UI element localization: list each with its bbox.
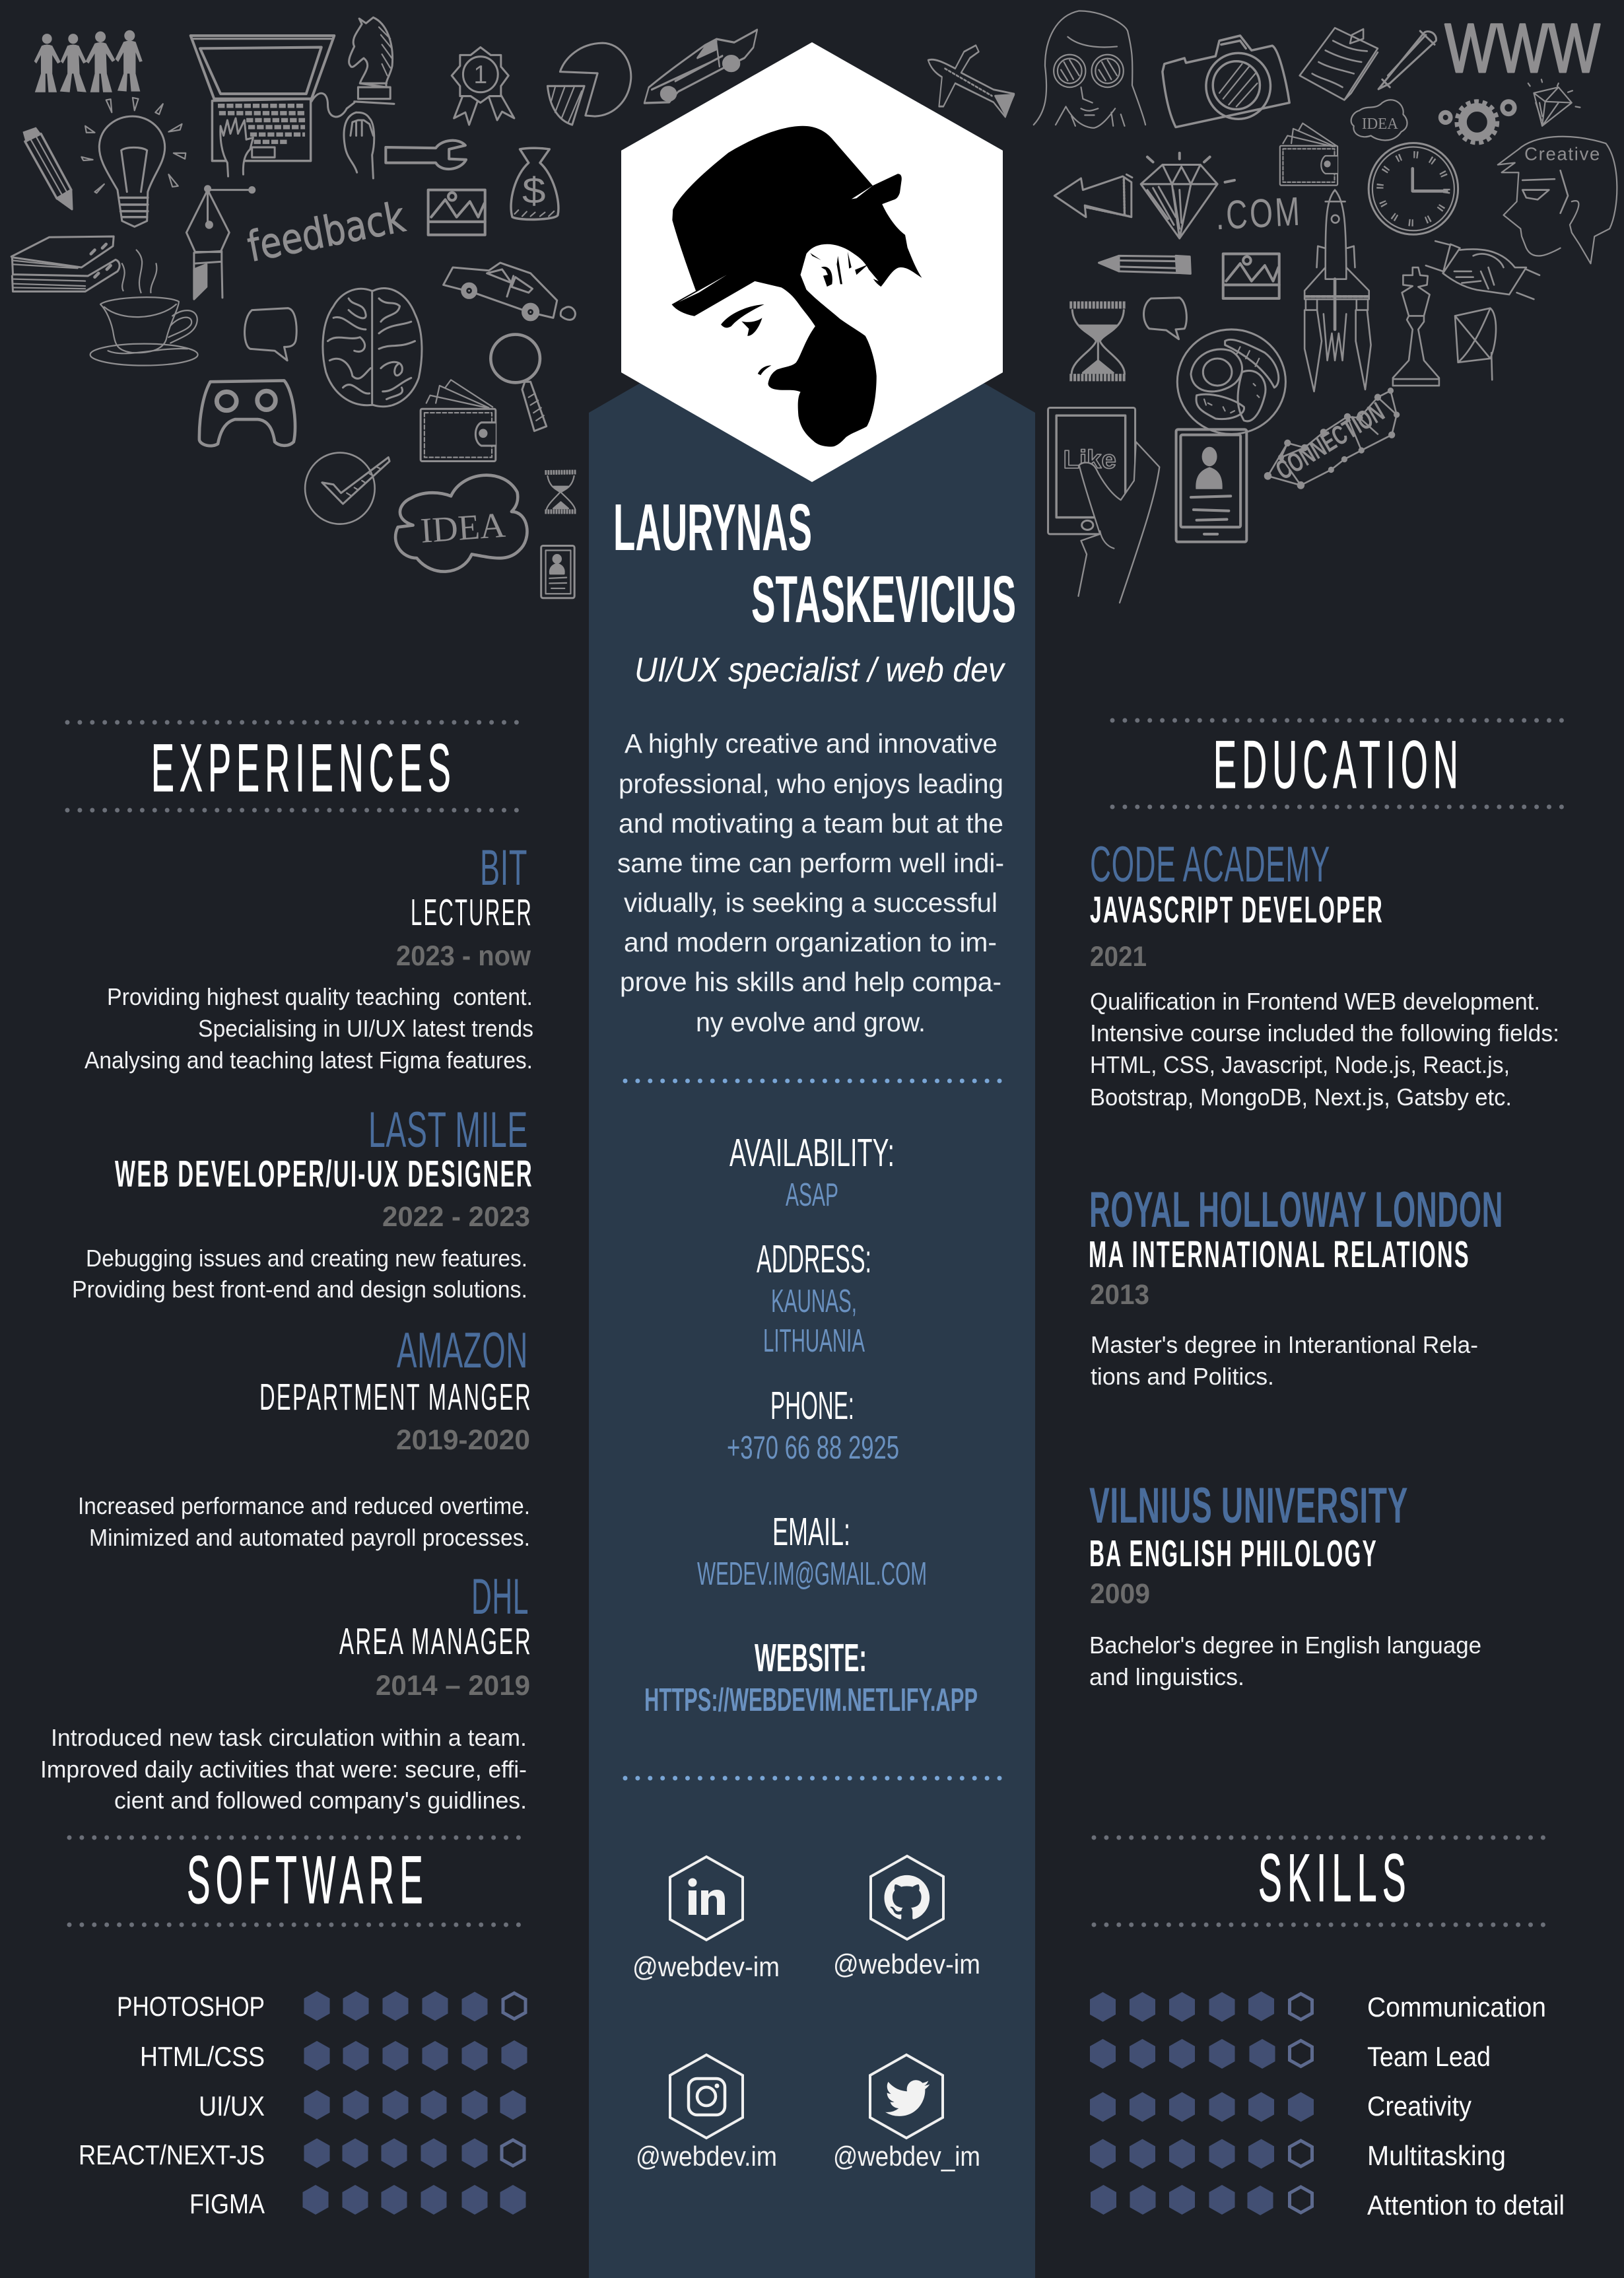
summary paragraph: A highly creative and innovative — [625, 728, 998, 759]
skill row: Photoshop: PHOTOSHOP — [117, 1991, 265, 2022]
panel: experiences — [40, 722, 533, 1814]
icon: wallet — [421, 380, 496, 462]
portrait silhouette — [671, 126, 922, 447]
icon: creative head — [1498, 137, 1617, 263]
school: Code Academy: Intensive course included the following fields: — [1090, 1019, 1559, 1047]
icon: arrow — [1054, 174, 1132, 217]
icon: books — [11, 236, 119, 291]
school: Vilnius University: VILNIUS UNIVERSITY — [1089, 1478, 1408, 1534]
social: Twitter: @webdev_im — [833, 2141, 980, 2172]
social: Twitter — [833, 2055, 980, 2172]
doodles: top car and plane — [644, 30, 1014, 117]
summary paragraph: prove his skills and help compa- — [620, 967, 1001, 997]
job: Last Mile: Debugging issues and creating new features. — [86, 1245, 527, 1272]
panel: software — [69, 1838, 527, 2219]
school: Vilnius University: BA ENGLISH PHILOLOGY — [1089, 1533, 1378, 1575]
address — [757, 1237, 871, 1359]
email: EMAIL: — [772, 1510, 850, 1554]
job: BIT: Specialising in UI/UX latest trends — [198, 1015, 533, 1042]
job: BIT: 2023 - now — [396, 940, 531, 972]
address: KAUNAS, — [771, 1284, 857, 1319]
icon: plane — [928, 46, 1014, 117]
job: Amazon: AMAZON — [397, 1323, 528, 1379]
icon: money bag: $ — [522, 170, 546, 211]
skill row: Attention to detail: Attention to detail — [1367, 2190, 1565, 2221]
icon: small idea cloud — [1351, 100, 1407, 140]
school: Code Academy: JAVASCRIPT DEVELOPER — [1090, 889, 1384, 931]
icon: plate of food — [1177, 329, 1285, 434]
icon: contact phone — [1176, 429, 1246, 542]
icon: idea cloud — [395, 475, 527, 572]
job: DHL — [40, 1569, 532, 1814]
skill row: Figma: FIGMA — [189, 2188, 265, 2219]
address: LITHUANIA — [763, 1323, 865, 1359]
icon: image frame — [428, 190, 485, 235]
social: Instagram: @webdev.im — [636, 2141, 777, 2172]
icon: rocket — [1304, 190, 1371, 392]
icon: camera — [1163, 36, 1289, 127]
icon: satellite dish — [1455, 308, 1496, 380]
phone — [727, 1384, 899, 1466]
heading: software: SOFTWARE — [187, 1842, 428, 1917]
job: Last Mile: 2022 - 2023 — [382, 1201, 530, 1233]
school: Code Academy: Qualification in Frontend WEB development. — [1090, 988, 1540, 1015]
icon: tea cup — [90, 250, 198, 366]
panel: skills — [1090, 1838, 1565, 2221]
job title: UI/UX specialist / web dev — [634, 651, 1006, 689]
school: Royal Holloway London: tions and Politics. — [1091, 1363, 1274, 1390]
icon: connection network — [1264, 388, 1400, 489]
availability: AVAILABILITY: — [729, 1131, 895, 1175]
skill row: Multitasking: Multitasking — [1367, 2140, 1506, 2171]
website: HTTPS://WEBDEVIM.NETLIFY.APP — [644, 1682, 978, 1718]
icon: woman with binoculars — [1034, 11, 1145, 128]
school: Royal Holloway London: 2013 — [1090, 1279, 1149, 1311]
skill row: Creativity — [1090, 2090, 1472, 2122]
icon: game controller — [199, 380, 295, 446]
school: Vilnius University: 2009 — [1090, 1578, 1150, 1610]
social: LinkedIn — [632, 1857, 780, 1982]
icon: image frame — [1223, 254, 1279, 298]
job: BIT: BIT — [480, 840, 527, 896]
skill row: Attention to detail — [1091, 2185, 1565, 2221]
social: GitHub: @webdev-im — [833, 1949, 980, 1980]
icon: wallet — [1280, 123, 1337, 186]
job: Last Mile: Providing best front-end and design solutions. — [72, 1276, 527, 1303]
social: GitHub — [833, 1856, 980, 1980]
school: Code Academy: Bootstrap, MongoDB, Next.js, Gatsby etc. — [1090, 1084, 1512, 1111]
skill row: UI/UX: UI/UX — [199, 2090, 265, 2122]
icon: check circle — [305, 453, 389, 524]
icon: notepad — [1300, 28, 1378, 100]
summary paragraph: and motivating a team but at the — [619, 808, 1003, 839]
school: Royal Holloway London — [1089, 1182, 1503, 1390]
social links — [632, 1856, 980, 2172]
skill row: React/Next-JS — [79, 2138, 524, 2170]
icon: medal — [452, 48, 514, 125]
icon: pen nib — [186, 186, 255, 299]
text doodle: .COM: .COM — [1215, 188, 1303, 238]
school: Code Academy — [1090, 837, 1559, 1111]
summary paragraph — [617, 728, 1004, 1037]
skill row: Team Lead: Team Lead — [1367, 2041, 1491, 2072]
job: Last Mile — [72, 1102, 533, 1303]
icon: creative head: Creative — [1524, 143, 1601, 164]
skill row: React/Next-JS: REACT/NEXT-JS — [79, 2139, 265, 2170]
phone: PHONE: — [770, 1384, 854, 1428]
job: Amazon: Increased performance and reduced overtime. — [78, 1492, 530, 1519]
icon: pencil — [22, 127, 72, 209]
website: WEBSITE: — [755, 1636, 867, 1680]
skill row: HTML/CSS — [140, 2040, 527, 2072]
job: Last Mile: LAST MILE — [368, 1102, 528, 1158]
icon: idea cloud: IDEA — [419, 504, 507, 551]
icon: small hourglass — [545, 472, 577, 512]
school: Vilnius University: Bachelor's degree in English language — [1089, 1632, 1481, 1659]
icon: speech bubble — [245, 308, 296, 361]
summary paragraph: professional, who enjoys leading — [619, 769, 1003, 799]
job: DHL: 2014 – 2019 — [376, 1670, 530, 1702]
icon: speech bubble — [1144, 298, 1186, 339]
icon: gears — [1440, 102, 1514, 143]
skill row: Creativity: Creativity — [1367, 2090, 1472, 2122]
job: DHL: AREA MANAGER — [339, 1620, 532, 1663]
school: Vilnius University: and linguistics. — [1089, 1663, 1244, 1690]
school: Vilnius University — [1089, 1478, 1481, 1690]
icon: small idea cloud: IDEA — [1362, 115, 1398, 133]
contact details — [644, 1131, 978, 1718]
icon: people holding hands — [34, 30, 143, 92]
job: BIT: Analysing and teaching latest Figma features. — [85, 1047, 533, 1074]
panel: education — [1089, 720, 1563, 1690]
icon: pencil — [1378, 31, 1436, 89]
summary paragraph: ny evolve and grow. — [696, 1007, 926, 1037]
skill row: Communication: Communication — [1367, 1991, 1546, 2022]
address: ADDRESS: — [757, 1237, 871, 1281]
email: WEDEV.IM@GMAIL.COM — [697, 1556, 927, 1592]
icon: tablet and hand with Like: Like — [1064, 446, 1116, 474]
job: Amazon — [78, 1323, 532, 1551]
icon: pie chart — [547, 43, 631, 125]
summary paragraph: and modern organization to im- — [624, 927, 997, 957]
heading: skills: SKILLS — [1258, 1840, 1411, 1916]
icon: laptop — [191, 36, 334, 176]
job: Amazon: 2019-2020 — [396, 1424, 530, 1456]
icon: wrench — [386, 141, 466, 169]
availability — [729, 1131, 895, 1213]
icon: hourglass — [1069, 305, 1126, 378]
website — [644, 1636, 978, 1718]
icon: handshake — [1426, 241, 1539, 299]
job: DHL: Improved daily activities that were: secure, effi- — [40, 1756, 527, 1783]
skill row: UI/UX — [199, 2090, 525, 2122]
summary paragraph: same time can perform well indi- — [617, 848, 1004, 878]
icon: tablet and hand with Like — [1048, 408, 1159, 603]
job: BIT: LECTURER — [411, 891, 533, 934]
doodles: right cluster — [1034, 9, 1617, 603]
icon: classic car — [444, 263, 575, 320]
job: BIT: Providing highest quality teaching content. — [107, 983, 533, 1010]
name: Staskevicius: STASKEVICIUS — [751, 563, 1016, 637]
name: Laurynas: LAURYNAS — [613, 491, 812, 565]
panel: center column — [589, 284, 1035, 2278]
icon: small diamond — [1528, 79, 1580, 126]
job: BIT — [85, 840, 533, 1074]
job: DHL: DHL — [471, 1569, 529, 1625]
job: Amazon: DEPARTMENT MANGER — [259, 1376, 532, 1418]
text doodle: feedback: feedback — [244, 193, 409, 271]
job: DHL: Introduced new task circulation within a team. — [51, 1724, 527, 1751]
icon: sports car — [644, 30, 757, 103]
profile hexagon — [621, 42, 1003, 482]
heading: experiences: EXPERIENCES — [151, 730, 456, 806]
school: Royal Holloway London: Master's degree in Interantional Rela- — [1091, 1331, 1478, 1358]
icon: chess knight and mouse hand — [312, 17, 394, 178]
icon: chess king — [1393, 267, 1439, 386]
summary paragraph: vidually, is seeking a successful — [624, 887, 998, 918]
skill row: Multitasking — [1090, 2139, 1506, 2171]
school: Code Academy: HTML, CSS, Javascript, Node.js, React.js, — [1090, 1051, 1510, 1078]
icon: small phone — [541, 545, 574, 598]
skill row: HTML/CSS: HTML/CSS — [140, 2041, 265, 2072]
social: LinkedIn: @webdev-im — [632, 1951, 780, 1982]
doodles: left cluster — [11, 17, 631, 598]
icon: medal: 1 — [474, 61, 487, 89]
icon: horizontal pencil — [1099, 256, 1190, 273]
job: Amazon: Minimized and automated payroll processes. — [89, 1524, 530, 1551]
school: Code Academy: CODE ACADEMY — [1090, 837, 1330, 893]
email — [697, 1510, 927, 1592]
job: DHL: cient and followed company's guidlines. — [114, 1787, 527, 1814]
icon: connection network: CONNECTION — [1271, 396, 1389, 486]
icon: magnifying glass — [491, 335, 547, 431]
phone: +370 66 88 2925 — [727, 1430, 899, 1466]
icon: light bulb — [81, 98, 186, 226]
social: Instagram — [636, 2055, 777, 2172]
job: Last Mile: WEB DEVELOPER/UI-UX DESIGNER — [115, 1153, 533, 1195]
skill row: Team Lead — [1090, 2039, 1491, 2072]
availability: ASAP — [786, 1177, 838, 1213]
icon: large diamond — [1141, 153, 1235, 238]
icon: money bag — [511, 148, 558, 219]
icon: clock — [1369, 143, 1458, 234]
school: Code Academy: 2021 — [1090, 941, 1147, 973]
skill row: Photoshop — [117, 1991, 525, 2022]
skill row: Communication — [1090, 1991, 1546, 2022]
skill row: Figma — [189, 2185, 525, 2219]
icon: brain — [323, 289, 422, 407]
